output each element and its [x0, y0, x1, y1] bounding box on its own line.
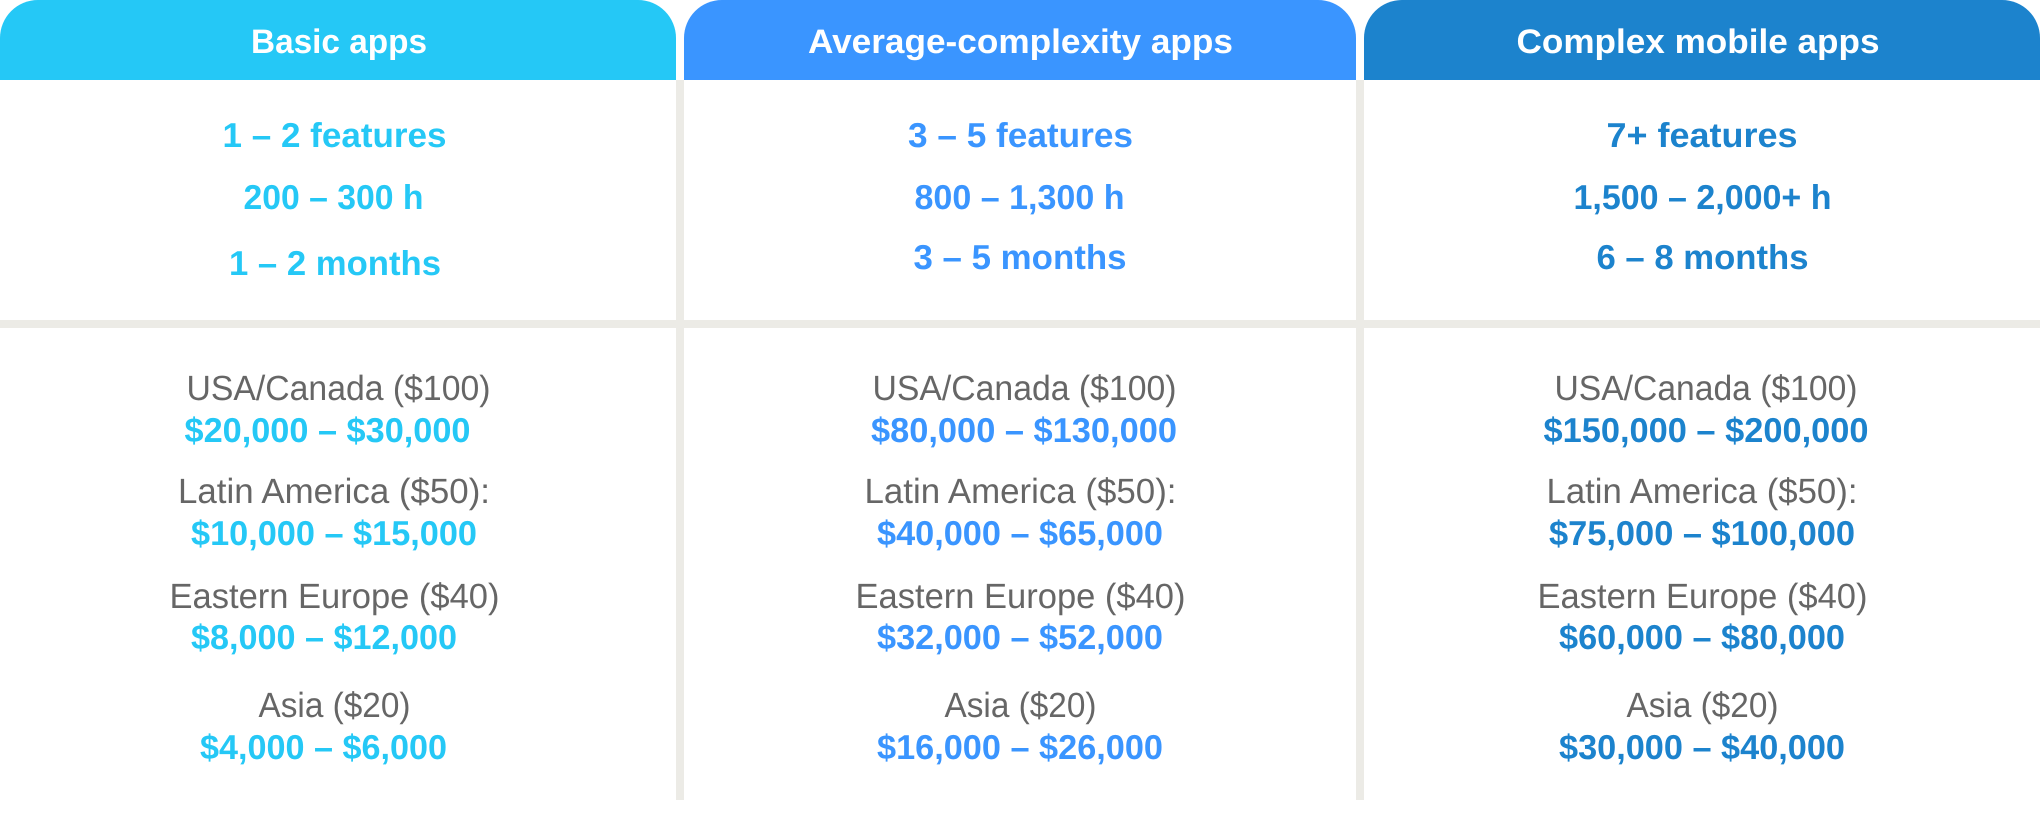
average apps: scope: 3 – 5 months	[914, 239, 1126, 277]
average apps: regional prices: $32,000 – $52,000	[877, 619, 1163, 657]
average apps: scope: 800 – 1,300 h	[914, 179, 1124, 217]
header: basic apps	[0, 0, 676, 80]
basic apps: regional prices: $10,000 – $15,000	[191, 515, 477, 553]
complex apps: regional prices	[1538, 369, 1868, 767]
basic apps: regional prices: USA/Canada ($100)	[186, 369, 490, 408]
header: basic apps: Basic apps	[251, 23, 427, 61]
average apps: regional prices: $80,000 – $130,000	[871, 412, 1177, 450]
average apps: regional prices: $40,000 – $65,000	[877, 515, 1163, 553]
basic apps: scope: 200 – 300 h	[244, 179, 424, 217]
basic apps: scope	[222, 117, 446, 283]
panel: average-complexity apps	[684, 0, 1356, 767]
complex apps: scope: 7+ features	[1606, 117, 1798, 155]
header: average-complexity apps	[684, 0, 1356, 80]
complex apps: regional prices: $30,000 – $40,000	[1559, 729, 1845, 767]
average apps: regional prices: $16,000 – $26,000	[877, 729, 1163, 767]
complex apps: regional prices: $75,000 – $100,000	[1549, 515, 1855, 553]
header: complex mobile apps: Complex mobile apps	[1516, 23, 1880, 61]
average apps: scope	[908, 117, 1133, 277]
basic apps: regional prices: Eastern Europe ($40)	[170, 577, 500, 616]
average apps: regional prices: Asia ($20)	[944, 686, 1096, 725]
basic apps: scope: 1 – 2 months	[229, 245, 441, 283]
panel: complex mobile apps	[1364, 0, 2040, 767]
average apps: scope: 3 – 5 features	[908, 117, 1133, 155]
complex apps: scope: 1,500 – 2,000+ h	[1574, 179, 1832, 217]
complex apps: regional prices: Latin America ($50):	[1546, 472, 1858, 511]
average apps: regional prices: USA/Canada ($100)	[872, 369, 1176, 408]
complex apps: scope	[1574, 117, 1832, 277]
header: average-complexity apps: Average-complexity apps	[808, 23, 1233, 61]
panel: basic apps	[0, 0, 676, 767]
complex apps: regional prices: Eastern Europe ($40)	[1538, 577, 1868, 616]
complex apps: regional prices: USA/Canada ($100)	[1554, 369, 1858, 408]
complex apps: scope: 6 – 8 months	[1596, 239, 1808, 277]
complex apps: regional prices: Asia ($20)	[1626, 686, 1778, 725]
average apps: regional prices: Latin America ($50):	[864, 472, 1176, 511]
average apps: regional prices: Eastern Europe ($40)	[856, 577, 1186, 616]
header: complex mobile apps	[1364, 0, 2040, 80]
basic apps: regional prices: $4,000 – $6,000	[200, 729, 447, 767]
basic apps: regional prices: $20,000 – $30,000	[184, 412, 470, 450]
basic apps: regional prices: Asia ($20)	[258, 686, 410, 725]
basic apps: regional prices: $8,000 – $12,000	[191, 619, 457, 657]
basic apps: regional prices	[170, 369, 500, 767]
complex apps: regional prices: $60,000 – $80,000	[1559, 619, 1845, 657]
basic apps: scope: 1 – 2 features	[222, 117, 446, 155]
average apps: regional prices	[856, 369, 1186, 767]
basic apps: regional prices: Latin America ($50):	[178, 472, 490, 511]
complex apps: regional prices: $150,000 – $200,000	[1544, 412, 1868, 450]
